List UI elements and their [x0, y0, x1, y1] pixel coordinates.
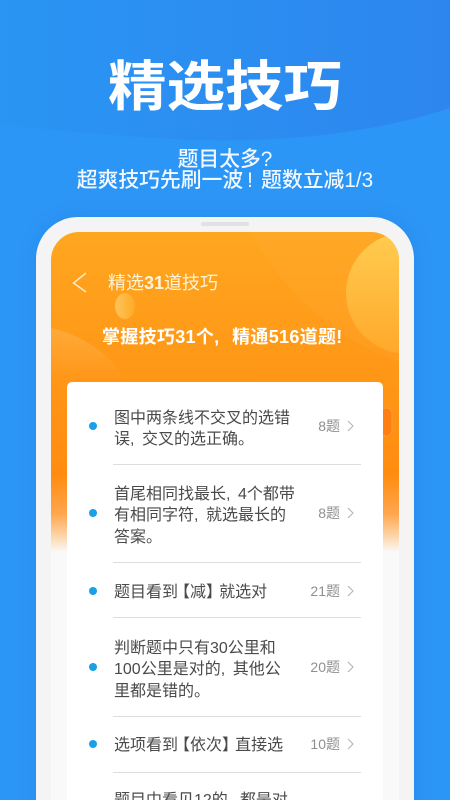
item 4: 20题 [310, 659, 340, 675]
speaker [201, 222, 249, 226]
item 4: 100公里是对的 其他公 [114, 661, 281, 678]
item 1: , [130, 431, 134, 448]
item 1: 8题 [318, 418, 340, 434]
banner text: , [214, 327, 219, 347]
subtitle: ! [247, 169, 253, 192]
item 2: 8题 [318, 505, 340, 521]
banner text: 掌握技巧31个 精通516道题! [102, 327, 343, 347]
orange header background [51, 232, 399, 550]
screen [51, 232, 399, 800]
back arrow [72, 272, 86, 292]
item 1: 误 交叉的选正确。 [114, 431, 254, 448]
item 2 [89, 485, 354, 546]
subtitle: 超爽技巧先刷一波 题数立减1/3 [77, 169, 373, 192]
subtitle [77, 148, 373, 192]
item 2: , [194, 507, 198, 524]
item 2: , [226, 486, 230, 503]
item 1: 图中两条线不交叉的选错 [114, 410, 290, 427]
item 4 [89, 639, 354, 700]
item 5 [89, 736, 354, 754]
nav title: 精选31道技巧 [108, 273, 218, 293]
item 1 [89, 409, 354, 448]
item 3: 题目看到【减】就选对 [114, 584, 267, 601]
subtitle: 题目太多? [178, 148, 272, 171]
item 2: 答案。 [114, 529, 162, 546]
item 3 [89, 583, 354, 601]
item 4: , [221, 661, 225, 678]
item 4: 判断题中只有30公里和 [114, 640, 276, 657]
item 3: 21题 [310, 583, 340, 599]
title: 精选技巧 [108, 57, 342, 118]
item 2: 有相同字符 就选最长的 [114, 507, 286, 524]
phone frame [36, 217, 414, 800]
item 2: 首尾相同找最长 4个都带 [114, 486, 295, 503]
list card [67, 382, 383, 800]
item 5: 选项看到【依次】直接选 [114, 737, 283, 754]
item 4: 里都是错的。 [114, 683, 210, 700]
item 5: 10题 [310, 736, 340, 752]
